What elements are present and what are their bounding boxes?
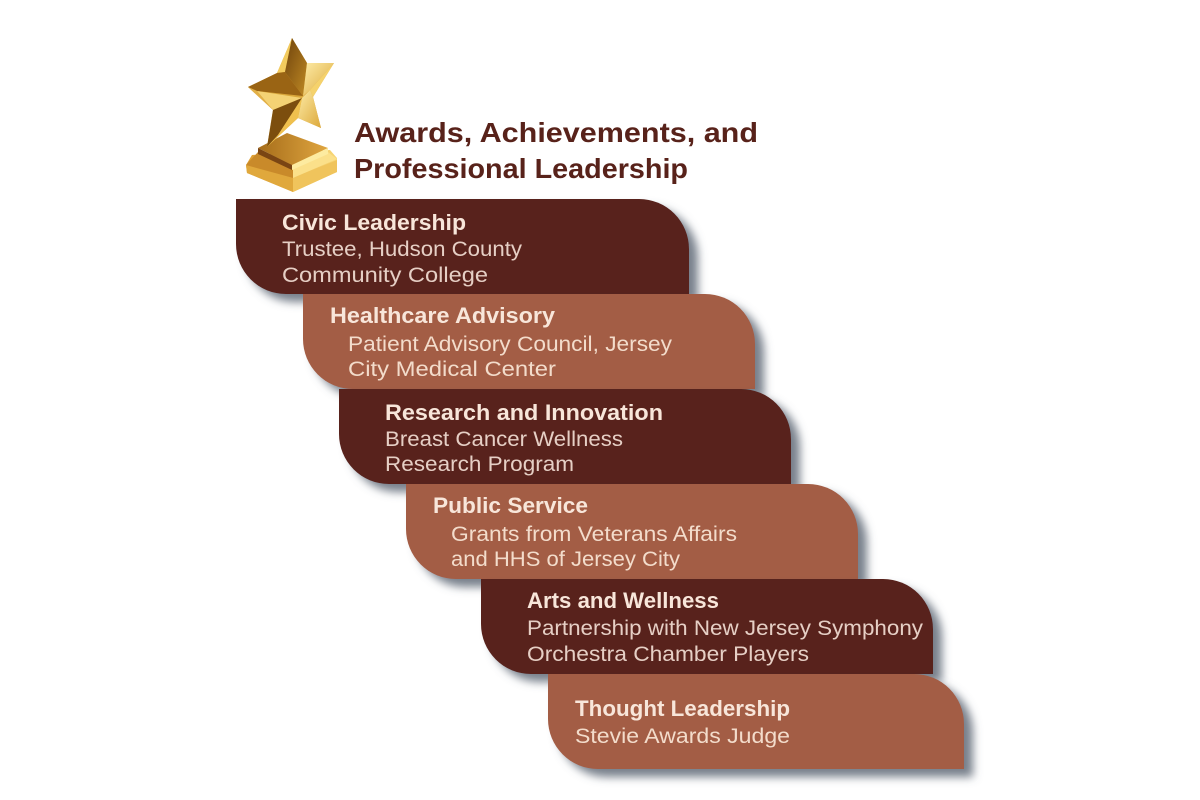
panel: Healthcare Advisory: City Medical Center	[348, 358, 556, 381]
panel: Civic Leadership: Trustee, Hudson County	[282, 238, 523, 261]
title	[354, 117, 758, 184]
panel: Thought Leadership: Thought Leadership	[575, 696, 790, 721]
title: Awards, Achievements, and	[354, 117, 758, 148]
panel: Public Service: Public Service	[433, 493, 588, 518]
trophy star	[248, 38, 334, 147]
panel: Civic Leadership	[236, 199, 689, 294]
panel: Thought Leadership	[548, 674, 964, 769]
panel: Public Service: and HHS of Jersey City	[451, 548, 681, 571]
panel: Research and Innovation: Research Program	[385, 453, 574, 476]
panel: Research and Innovation	[339, 389, 791, 484]
trophy base	[246, 133, 337, 192]
panel: Public Service: Grants from Veterans Affairs	[451, 523, 737, 546]
panel: Arts and Wellness: Partnership with New Jersey Symphony	[527, 617, 924, 640]
panel: Research and Innovation: Breast Cancer Wellness	[385, 428, 623, 451]
icon: gold star trophy	[246, 38, 337, 192]
panel: Civic Leadership: Civic Leadership	[282, 210, 466, 235]
panel: Arts and Wellness: Orchestra Chamber Players	[527, 643, 809, 666]
panel: Civic Leadership: Community College	[282, 264, 488, 287]
panel: Arts and Wellness: Arts and Wellness	[527, 588, 719, 613]
panel: Public Service	[406, 484, 858, 579]
panel: Healthcare Advisory: Patient Advisory Council, Jersey	[348, 333, 673, 356]
panel: Arts and Wellness	[481, 579, 933, 674]
panel: Healthcare Advisory	[303, 294, 755, 389]
title: Professional Leadership	[354, 153, 688, 184]
panel: Research and Innovation: Research and Innovation	[385, 400, 663, 425]
panel: Thought Leadership: Stevie Awards Judge	[575, 725, 790, 748]
panel: Healthcare Advisory: Healthcare Advisory	[330, 303, 556, 328]
